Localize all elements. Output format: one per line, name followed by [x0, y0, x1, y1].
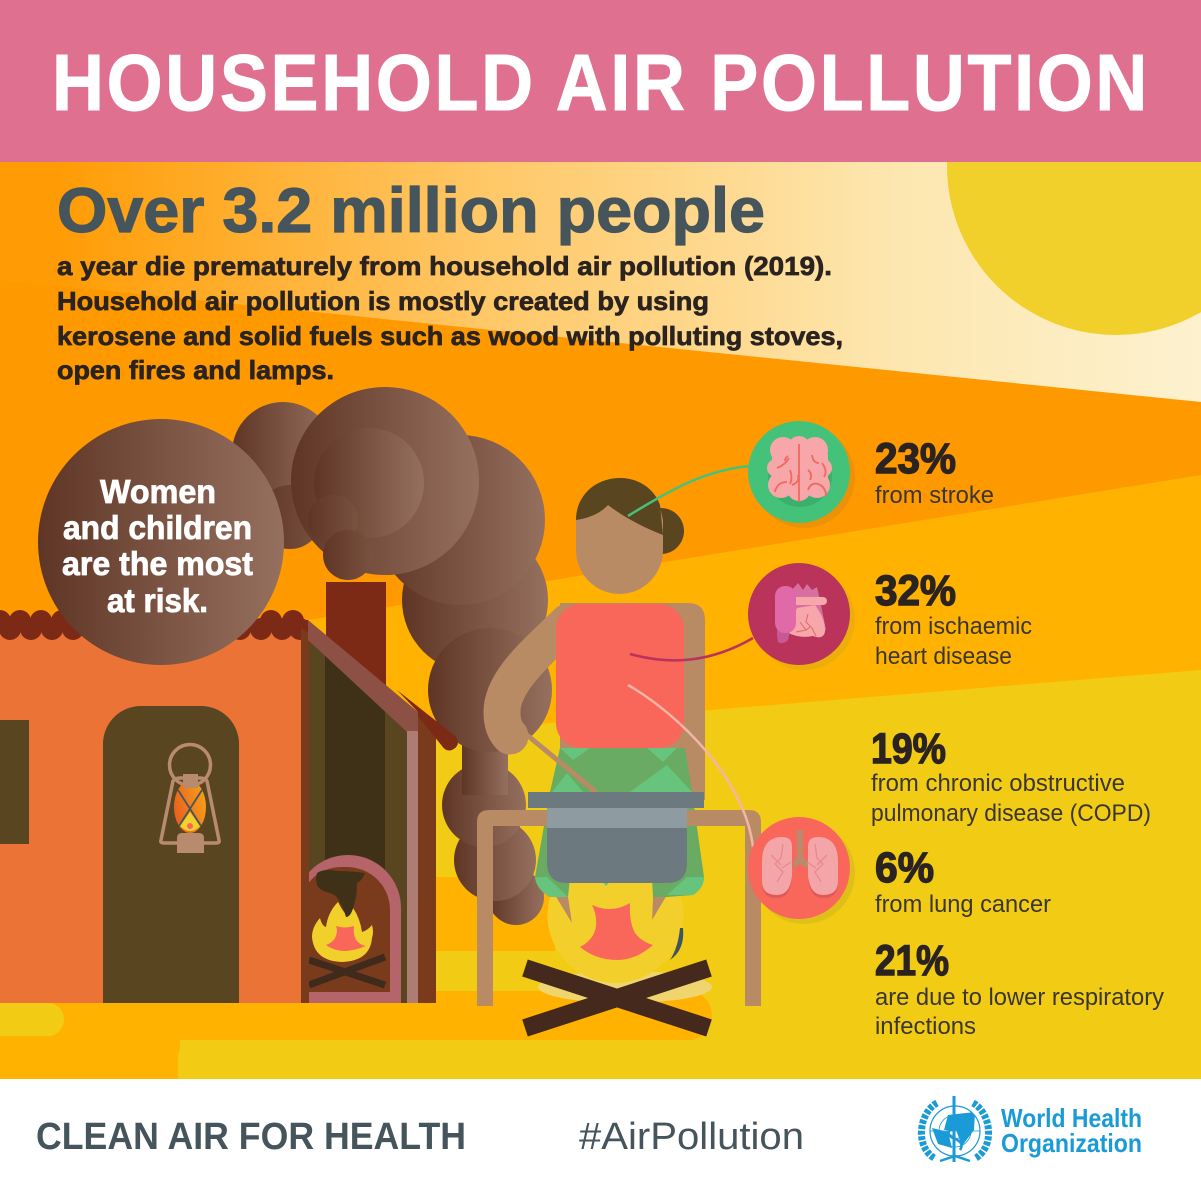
- callout: women and children: and children: [63, 509, 252, 546]
- left arm: [502, 622, 568, 736]
- WHO logo: [921, 1096, 1142, 1162]
- fireplace: [309, 855, 401, 1003]
- woman: [502, 478, 705, 923]
- footer: [37, 1096, 1141, 1162]
- intro text: [57, 251, 843, 385]
- callout: women and children: [38, 419, 284, 665]
- intro text: open fires and lamps.: [57, 355, 334, 385]
- sun: [947, 162, 1201, 335]
- callout: women and children: at risk.: [107, 582, 208, 619]
- shirt: [556, 604, 684, 748]
- emblem: [921, 1096, 989, 1162]
- door: [103, 706, 239, 1003]
- WHO logo: Organization: [1001, 1128, 1142, 1158]
- window: [0, 720, 29, 844]
- icon: heart: [748, 563, 855, 670]
- stat: heart disease: [875, 567, 1032, 670]
- intro text: kerosene and solid fuels such as wood with polluting stoves,: [57, 321, 843, 351]
- stat: lower respiratory infections: [875, 937, 1164, 1040]
- side gable wall: [301, 628, 436, 1003]
- cooking pot: [528, 792, 704, 883]
- stat: lower respiratory infections: are due to lower respiratory: [875, 984, 1164, 1011]
- spoon: [527, 735, 596, 792]
- fire glow base: [538, 971, 712, 1003]
- roof eave: [397, 690, 458, 750]
- stat: stroke: [875, 435, 994, 509]
- stat: lung cancer: [875, 844, 1051, 918]
- stat: COPD: [871, 725, 1151, 827]
- fire inner: [568, 878, 667, 960]
- stat: stroke: 23%: [875, 435, 956, 483]
- connector: brain: [628, 466, 750, 516]
- fire edge shadow: [670, 928, 683, 960]
- head: [576, 500, 663, 594]
- stat: heart disease: heart disease: [875, 643, 1012, 670]
- stat: lung cancer: from lung cancer: [875, 891, 1051, 918]
- hair bun: [638, 508, 684, 554]
- house: [0, 610, 458, 1003]
- intro text: a year die prematurely from household air pollution (2019).: [57, 251, 832, 281]
- stat: COPD: pulmonary disease (COPD): [871, 800, 1151, 827]
- slogan: CLEAN AIR FOR HEALTH: [36, 1116, 466, 1158]
- icon: lungs: [748, 817, 855, 924]
- callout: women and children: are the most: [62, 545, 253, 582]
- stat: lung cancer: 6%: [875, 844, 934, 892]
- background bands: [0, 162, 1201, 1079]
- bench: [477, 810, 761, 1006]
- intro text: Household air pollution is mostly created by using: [57, 286, 709, 316]
- stat: heart disease: from ischaemic: [875, 613, 1032, 640]
- connector: heart: [630, 638, 753, 660]
- skirt: [535, 748, 704, 897]
- headline: Over 3.2 million people: [57, 176, 765, 246]
- wordmark: World Health: [1001, 1103, 1142, 1133]
- icon: brain: [748, 421, 855, 528]
- roof trim: [308, 620, 418, 732]
- stat: lower respiratory infections: infections: [875, 1013, 976, 1040]
- logs: [525, 968, 709, 1028]
- fire outer flame: [548, 847, 684, 983]
- smoke cloud: [232, 387, 552, 925]
- stat: lower respiratory infections: 21%: [875, 937, 949, 985]
- hashtag: #AirPollution: [579, 1116, 804, 1158]
- stat: COPD: 19%: [871, 725, 946, 773]
- icon: lantern: [161, 744, 219, 853]
- skin: shoulders and right arm: [560, 603, 705, 800]
- stat: COPD: from chronic obstructive: [871, 770, 1125, 797]
- house chimney: [326, 582, 386, 712]
- roof tiles: [0, 610, 311, 640]
- feet: [555, 895, 667, 923]
- header banner: [0, 0, 1201, 162]
- connector: lungs: [628, 685, 753, 847]
- callout: women and children: Women: [100, 473, 216, 510]
- hair: [576, 478, 663, 535]
- stat: stroke: from stroke: [875, 482, 994, 509]
- front wall: [0, 630, 302, 1003]
- stat: heart disease: 32%: [875, 567, 956, 615]
- cooking scene: [477, 478, 761, 1028]
